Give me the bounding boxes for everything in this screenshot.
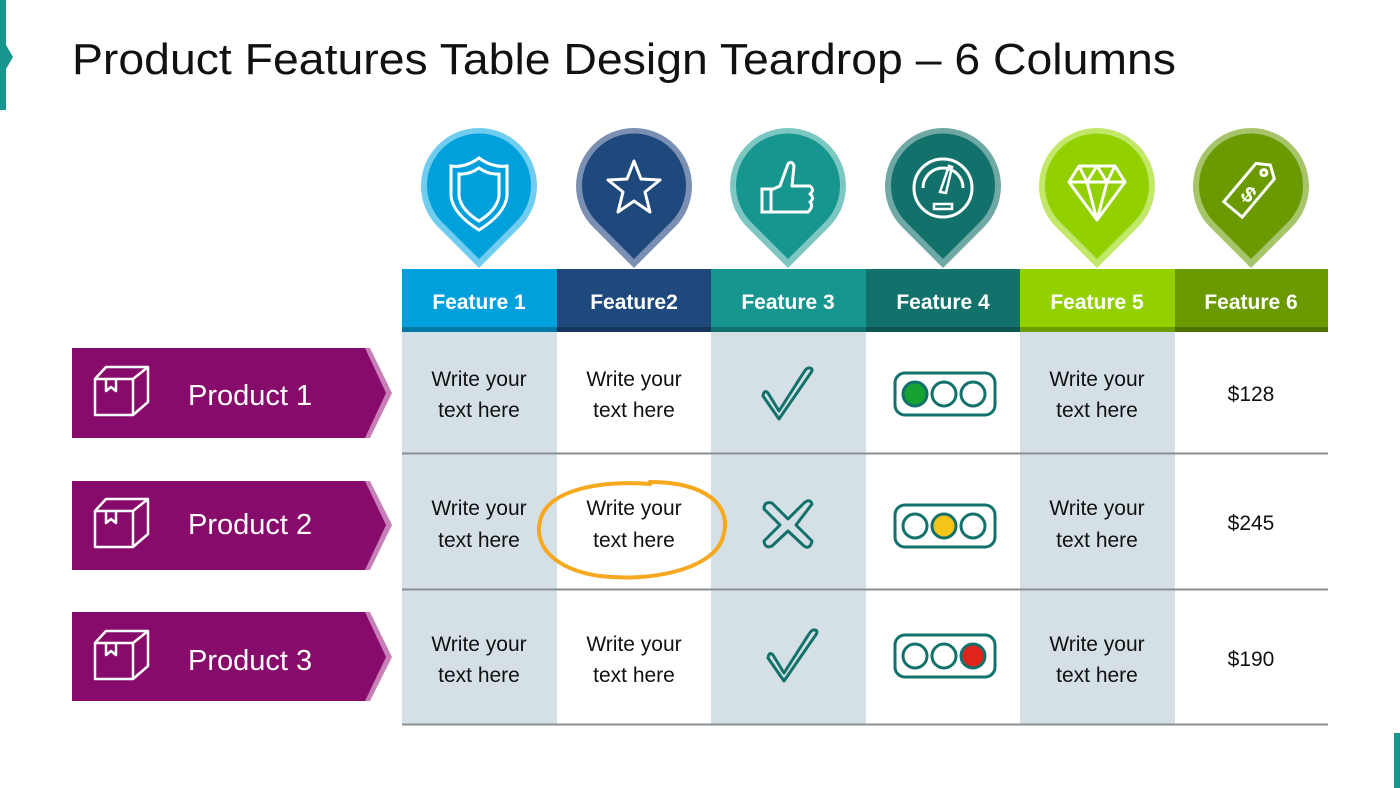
cell texts: text here xyxy=(438,529,520,552)
product 2 xyxy=(72,481,392,570)
cell texts: $128 xyxy=(1228,383,1274,406)
pin: feature 5 diamond xyxy=(1039,128,1155,268)
product labels xyxy=(72,348,392,701)
cell texts: text here xyxy=(438,399,520,422)
header row: Feature2 xyxy=(590,291,678,314)
cell texts: Write your xyxy=(1049,368,1145,391)
orange highlight circle xyxy=(539,482,725,578)
product 1 xyxy=(72,348,392,438)
cell texts: text here xyxy=(593,529,675,552)
header row: Feature 6 xyxy=(1204,291,1298,314)
cell texts: Write your xyxy=(586,497,682,520)
pin: feature 1 shield xyxy=(421,128,537,268)
pin: feature 2 star xyxy=(576,128,692,268)
accent bar bottom right xyxy=(1394,733,1400,788)
cell texts: Write your xyxy=(1049,497,1145,520)
table background shaded columns xyxy=(402,332,1328,724)
icon: check row 1 xyxy=(763,368,812,419)
product 1: Product 1 xyxy=(188,380,312,412)
pin: feature 6 price tag: $ xyxy=(1236,181,1261,208)
cell texts: Write your xyxy=(431,368,527,391)
cell texts: Write your xyxy=(586,633,682,656)
traffic light row 1 xyxy=(895,373,995,415)
header row: Feature 1 xyxy=(432,291,526,314)
cell texts: Write your xyxy=(431,633,527,656)
cell texts: text here xyxy=(1056,529,1138,552)
header row: Feature 3 xyxy=(741,291,835,314)
traffic light row 3 xyxy=(895,635,995,677)
traffic light row 2 xyxy=(895,505,995,547)
title: Product Features Table Design Teardrop – 6 Columns xyxy=(72,35,1176,84)
cell texts: text here xyxy=(593,399,675,422)
cell texts: text here xyxy=(1056,664,1138,687)
cell texts: Write your xyxy=(1049,633,1145,656)
pin: feature 4 gauge xyxy=(885,128,1001,268)
cell texts xyxy=(431,368,1274,687)
header row: Feature 4 xyxy=(896,291,990,314)
cell texts: text here xyxy=(593,664,675,687)
product 3 xyxy=(72,612,392,701)
cell texts: text here xyxy=(1056,399,1138,422)
accent bar left xyxy=(0,0,13,110)
header row: Feature 5 xyxy=(1050,291,1144,314)
cell texts: $245 xyxy=(1228,512,1274,535)
product 3: Product 3 xyxy=(188,645,312,677)
cell texts: $190 xyxy=(1228,648,1274,671)
header row xyxy=(402,269,1328,332)
product 2: Product 2 xyxy=(188,509,312,541)
pin: feature 3 thumbs up xyxy=(730,128,846,268)
pin: feature 6 price tag xyxy=(1193,128,1309,268)
icon: check row 3 xyxy=(768,630,817,681)
cell texts: Write your xyxy=(586,368,682,391)
cell texts: Write your xyxy=(431,497,527,520)
icon: cross row 2 xyxy=(764,501,812,547)
cell texts: text here xyxy=(438,664,520,687)
